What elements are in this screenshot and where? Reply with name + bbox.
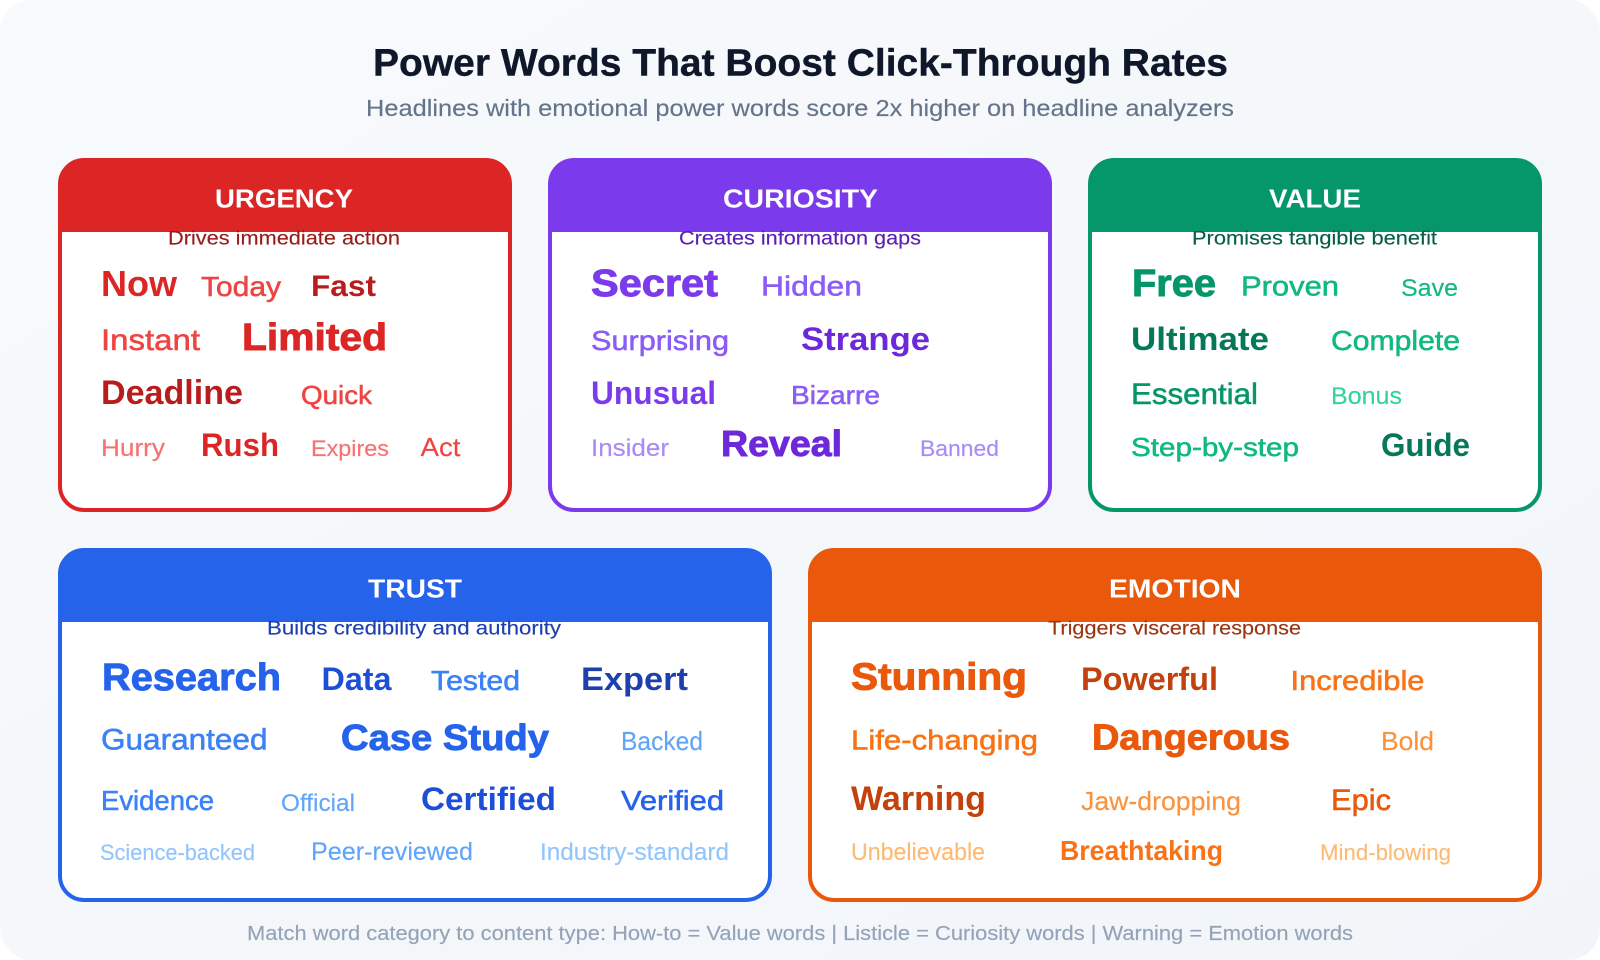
word: Rush: Rush [201,427,279,463]
panel: trust [60,550,770,900]
word: Dangerous: Dangerous [1092,716,1290,758]
word: Stunning: Stunning [851,656,1027,698]
header band [60,160,510,232]
word: Verified: Verified [621,785,724,816]
word: Limited: Limited [242,317,387,359]
word: Peer-reviewed: Peer-reviewed [311,838,473,866]
word: Proven: Proven [1241,270,1339,302]
word: Tested: Tested [431,665,520,696]
word: Expert: Expert [581,661,688,697]
word: Bizarre: Bizarre [791,380,880,410]
word: Breathtaking: Breathtaking [1060,835,1223,866]
word: Free: Free [1132,263,1216,305]
word: Data: Data [322,661,392,697]
word: Industry-standard: Industry-standard [540,839,729,866]
tagline: Builds credibility and authority [267,618,562,640]
heading: urgency: URGENCY [215,184,353,214]
word: Guaranteed: Guaranteed [101,724,268,756]
word: Hidden: Hidden [761,270,862,302]
word: Unbelievable: Unbelievable [851,839,985,866]
word: Complete: Complete [1331,325,1460,356]
word: Surprising: Surprising [591,325,729,356]
header band [60,550,770,622]
subtitle: Headlines with emotional power words score 2x higher on headline analyzers [366,95,1234,121]
footer note: Match word category to content type: How-to = Value words | Listicle = Curiosity words | Warning = Emotion words [247,923,1353,945]
title: Power Words That Boost Click-Through Rates [373,42,1228,84]
panel: value [1090,160,1540,510]
word: Guide: Guide [1381,427,1470,463]
word: Unusual: Unusual [591,375,716,411]
word: Instant: Instant [101,324,201,357]
card frame [60,550,770,900]
word: Expires: Expires [311,436,389,461]
header band [810,550,1540,622]
word: Life-changing: Life-changing [851,724,1038,756]
word cloud: emotion [851,656,1451,866]
word: Bonus: Bonus [1331,383,1402,410]
word: Save: Save [1401,275,1458,302]
word: Science-backed: Science-backed [100,840,255,865]
word: Insider: Insider [591,435,669,462]
tagline: Promises tangible benefit [1192,228,1438,250]
word: Now: Now [101,263,178,304]
word: Incredible: Incredible [1290,665,1424,696]
word: Certified: Certified [421,781,556,817]
word: Bold: Bold [1381,726,1434,756]
word: Official: Official [281,790,355,817]
word: Backed: Backed [621,726,703,756]
card frame [1090,160,1540,510]
word: Strange: Strange [801,321,930,357]
word: Ultimate: Ultimate [1131,321,1269,357]
word: Evidence: Evidence [101,785,214,816]
word: Research: Research [102,657,281,699]
word: Act: Act [420,432,461,462]
word: Secret: Secret [591,263,718,305]
word: Deadline: Deadline [101,374,243,412]
panel: curiosity [550,160,1050,510]
word: Powerful: Powerful [1081,661,1218,697]
word: Case Study: Case Study [341,717,549,758]
card frame [60,160,510,510]
word cloud: urgency [101,263,461,463]
word: Step-by-step: Step-by-step [1131,432,1299,462]
heading: curiosity: CURIOSITY [723,184,878,214]
word: Mind-blowing: Mind-blowing [1320,840,1451,865]
word cloud: trust [100,657,729,866]
header band [550,160,1050,232]
word: Today: Today [201,271,281,302]
word: Quick: Quick [301,380,373,410]
word cloud: value [1131,263,1470,463]
tagline: Creates information gaps [679,228,921,250]
word: Jaw-dropping: Jaw-dropping [1081,786,1241,816]
heading: trust: TRUST [368,574,462,604]
header band [1090,160,1540,232]
heading: value: VALUE [1269,184,1361,214]
word: Fast: Fast [311,270,376,303]
tagline: Drives immediate action [168,228,400,250]
heading: emotion: EMOTION [1109,574,1241,604]
card frame [550,160,1050,510]
card frame [810,550,1540,900]
panel: emotion [810,550,1540,900]
word cloud: curiosity [591,263,999,464]
word: Warning: Warning [851,780,986,818]
word: Hurry: Hurry [101,435,165,462]
word: Essential: Essential [1131,378,1258,411]
word: Banned: Banned [920,436,999,461]
word: Reveal: Reveal [721,423,842,464]
tagline: Triggers visceral response [1048,618,1301,640]
word: Epic: Epic [1331,784,1391,817]
panel: urgency [60,160,510,510]
